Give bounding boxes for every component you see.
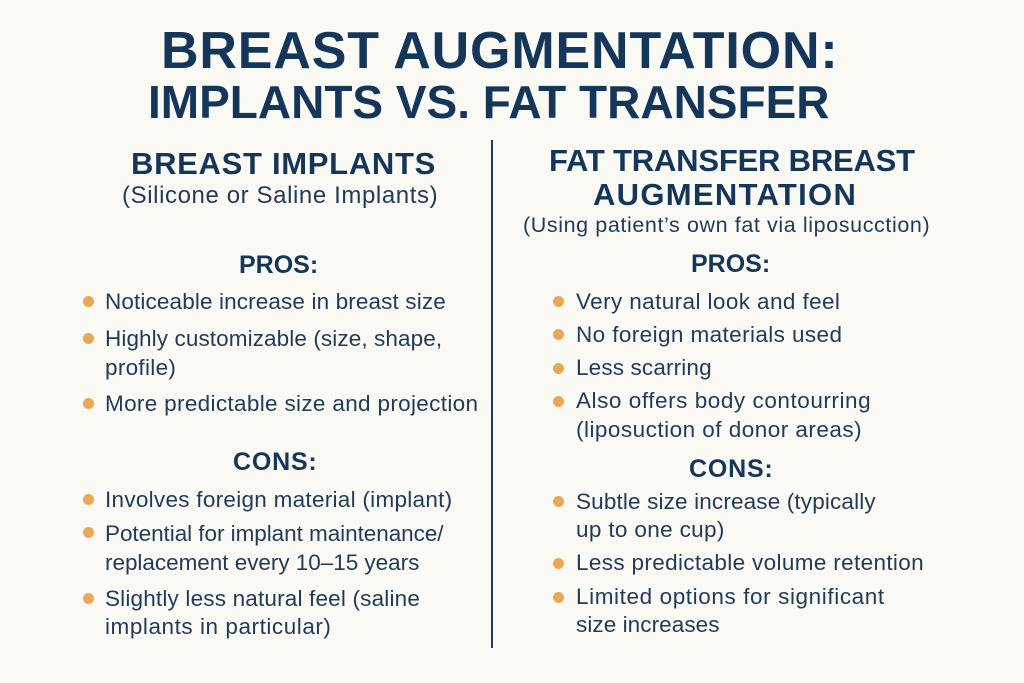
list: fat transfer pros: No foreign materials used: [576, 322, 842, 347]
list: fat transfer pros: [553, 289, 871, 442]
heading: breast implants: BREAST IMPLANTS: [131, 146, 436, 181]
subheading: implants: (Silicone or Saline Implants): [122, 182, 438, 209]
title: IMPLANTS VS. FAT TRANSFER: [148, 76, 830, 128]
list: implant cons: replacement every 10–15 years: [105, 550, 419, 575]
list: implant cons: [83, 487, 452, 639]
list: implant pros: Noticeable increase in breast size: [105, 289, 446, 314]
heading: fat transfer: FAT TRANSFER BREAST: [549, 143, 915, 178]
list: implant pros: Highly customizable (size, shape,: [105, 326, 442, 351]
list: fat transfer cons: Less predictable volume retention: [576, 550, 924, 575]
list: fat transfer pros: (liposuction of donor areas): [576, 417, 862, 442]
list: fat transfer cons: [553, 489, 924, 637]
list: implant cons: Slightly less natural feel (saline: [105, 586, 420, 611]
list: fat transfer cons: size increases: [576, 612, 720, 637]
list: implant pros: profile): [105, 355, 176, 380]
title: BREAST AUGMENTATION:: [161, 22, 839, 80]
heading: cons: CONS:: [233, 448, 318, 476]
list: implant cons: Potential for implant maintenance/: [105, 521, 444, 546]
panel: fat transfer: [523, 143, 930, 637]
list: implant pros: [83, 289, 478, 416]
heading: augmentation: AUGMENTATION: [593, 177, 857, 212]
list: implant pros: More predictable size and projection: [105, 391, 478, 416]
list: implant cons: Involves foreign material (implant): [105, 487, 452, 512]
list: fat transfer cons: Limited options for significant: [576, 584, 885, 609]
title: [148, 22, 839, 128]
list: fat transfer cons: Subtle size increase (typically: [576, 489, 876, 514]
heading: pros: PROS:: [239, 251, 318, 279]
list: fat transfer pros: Very natural look and feel: [576, 289, 840, 314]
subheading: fat transfer: (Using patient’s own fat via liposucction): [523, 213, 930, 237]
center divider: [491, 140, 492, 648]
list: fat transfer pros: Also offers body contourring: [576, 388, 871, 413]
list: fat transfer cons: up to one cup): [576, 517, 725, 542]
list: fat transfer pros: Less scarring: [576, 355, 712, 380]
heading: pros: PROS:: [691, 250, 770, 278]
list: implant cons: implants in particular): [105, 614, 331, 639]
panel: breast implants: [83, 146, 478, 639]
heading: cons: CONS:: [689, 455, 774, 483]
